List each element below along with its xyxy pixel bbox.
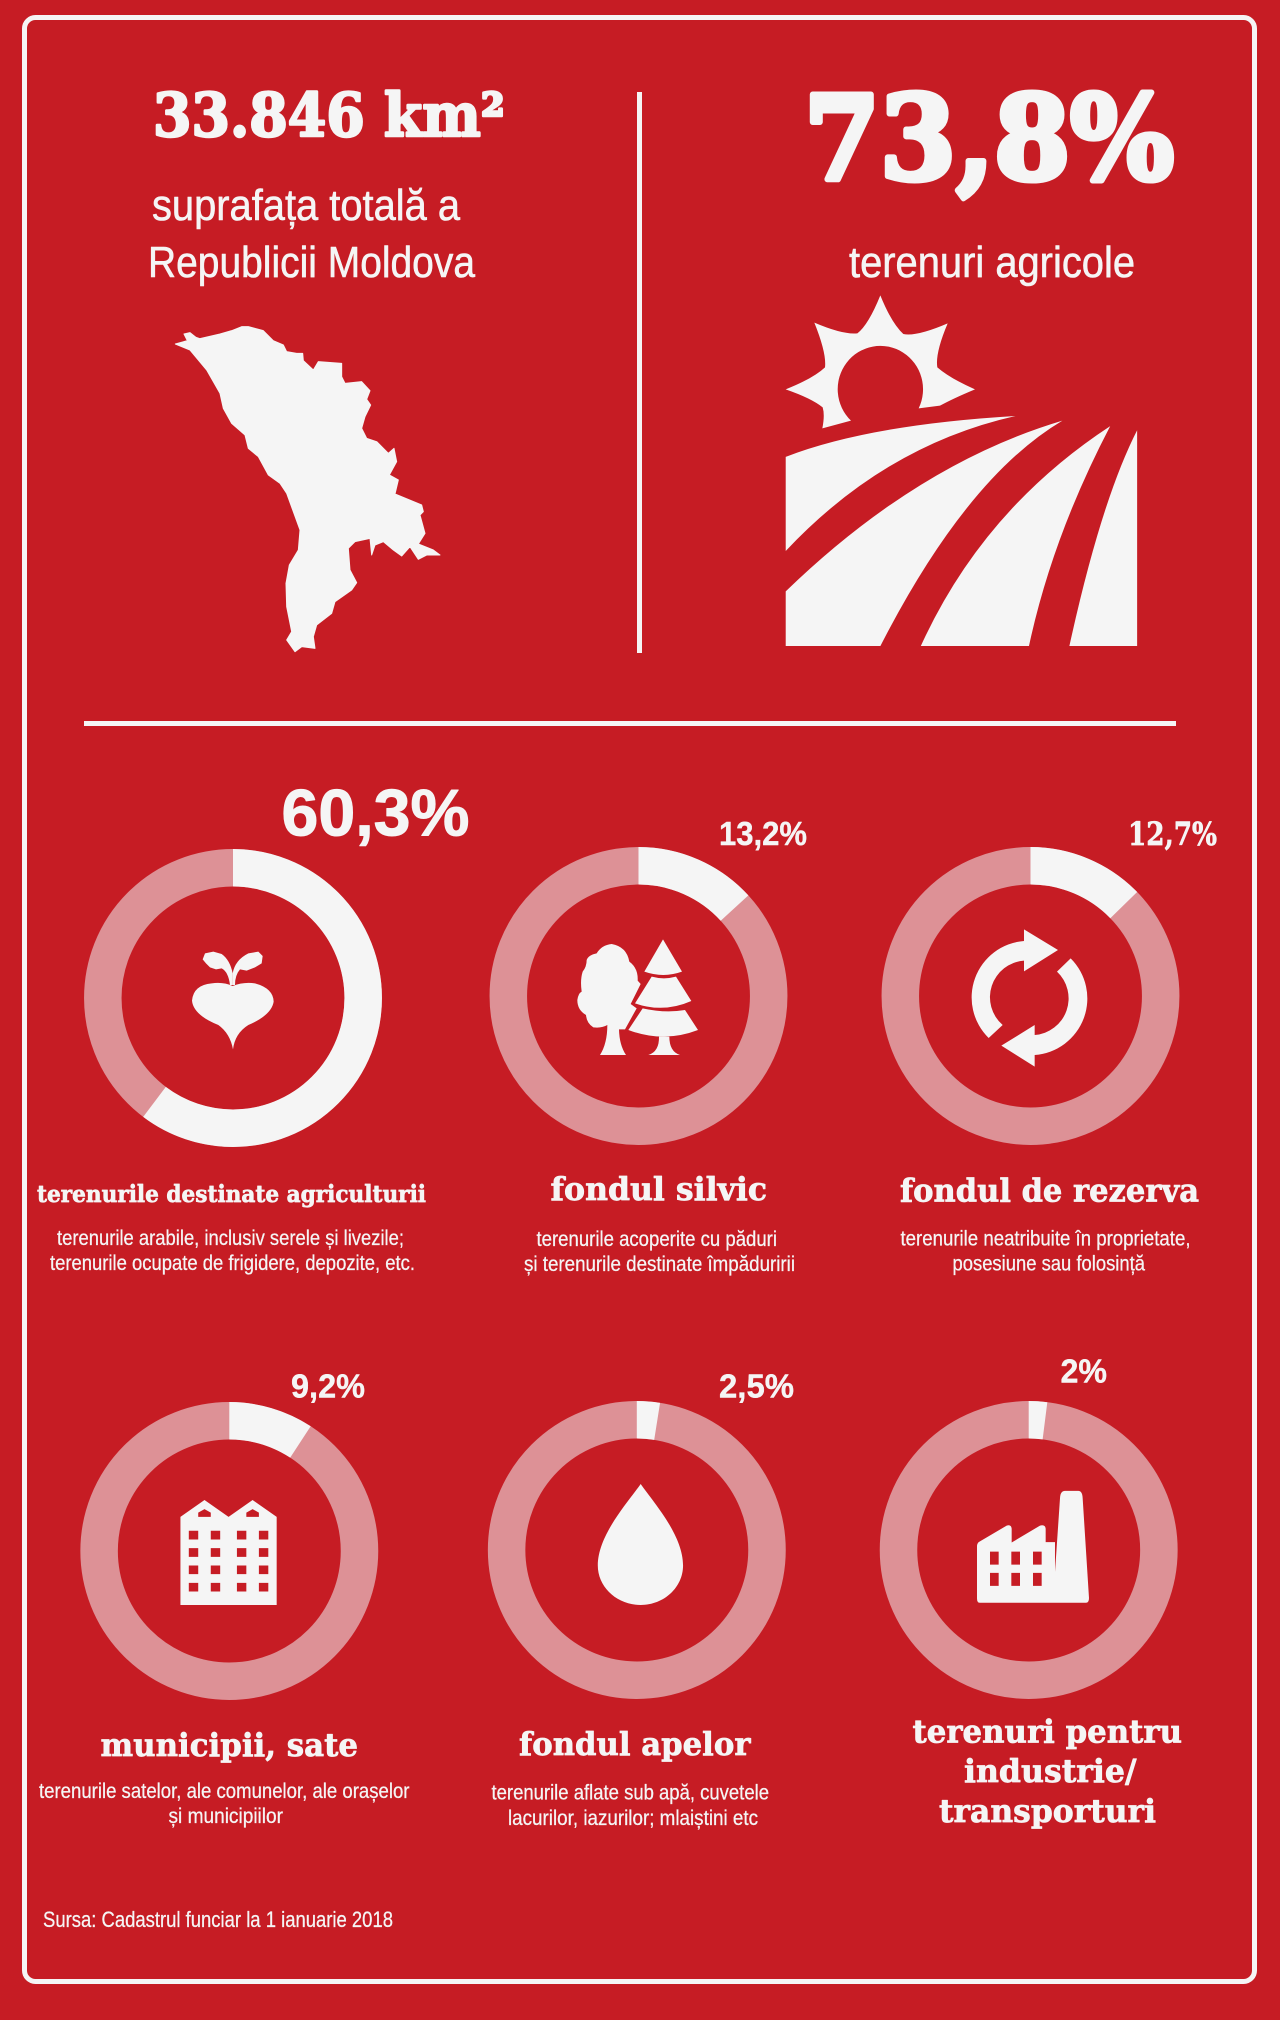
text: reserve fund description: posesiune sau folosință [952,1252,1145,1276]
heading: industry and transport: industrie/ [964,1752,1137,1790]
panel: industry and transport [898,1352,1182,1830]
icon: sun over field [786,295,1137,646]
heading: total area value: 33.846 km² [153,81,505,151]
panel: agriculture land [37,776,470,1275]
text: agriculture land description: terenurile ocupate de frigidere, depozite, etc. [50,1252,415,1275]
text: total area description: Republicii Moldova [148,238,475,287]
percentage: 12,7%: 12,7% [1128,815,1217,853]
donut chart: 2,5% [507,1420,767,1680]
icon: building [180,1500,277,1605]
icon: recycle arrows [972,929,1087,1067]
panel: total area [148,81,505,652]
text: total area description: suprafața totală a [152,181,460,230]
heading: municipalities: municipii, sate [100,1726,358,1764]
heading: industry and transport: transporturi [939,1792,1156,1830]
heading: agricultural land value: 73,8% [804,71,1174,207]
icon: beet [192,952,274,1049]
text: forest fund description: și terenurile destinate împăduririi [524,1253,795,1276]
percentage: 9,2%: 9,2% [291,1368,365,1404]
heading: agriculture land: terenurile destinate agriculturii [37,1181,426,1208]
donut chart: 13,2% [508,866,769,1126]
text: agriculture land description: terenurile arabile, inclusiv serele și livezile; [57,1227,404,1250]
text: water fund description: lacurilor, iazurilor; mlaiștini etc [508,1807,758,1830]
heading: reserve fund: fondul de rezerva [900,1172,1199,1210]
donut chart: 12,7% [900,866,1161,1126]
text: water fund description: terenurile aflate sub apă, cuvetele [492,1782,769,1804]
panel: municipalities [39,1368,410,1828]
donut chart: 60,3% [103,868,363,1128]
panel: water fund [492,1368,794,1830]
panel: agricultural land [786,71,1174,646]
percentage: 2,5%: 2,5% [719,1368,794,1404]
icon: map of Moldova [175,327,440,652]
text: agricultural land label: terenuri agricole [849,238,1135,287]
text: reserve fund description: terenurile neatribuite în proprietate, [900,1228,1190,1250]
text: agriculture land description [50,1227,415,1275]
icon: water drop [598,1484,683,1605]
text: reserve fund description [900,1228,1190,1276]
source note: Sursa: Cadastrul funciar la 1 ianuarie 2018 [43,1907,393,1932]
text: municipalities description [39,1780,410,1828]
heading: industry and transport: terenuri pentru [912,1712,1182,1750]
text: forest fund description [524,1228,795,1276]
heading: forest fund: fondul silvic [550,1170,767,1208]
heading: industry and transport [912,1712,1182,1830]
panel: reserve fund [900,815,1217,1276]
panel: forest fund [508,815,807,1276]
icon: factory [977,1491,1089,1603]
heading: water fund: fondul apelor [519,1725,752,1763]
icon: trees [577,939,698,1055]
percentage: 60,3%: 60,3% [282,776,470,850]
text: municipalities description: și municipiilor [168,1805,283,1828]
donut chart: 2% [898,1420,1159,1680]
text: total area description [148,181,475,287]
donut chart: 9,2% [99,1421,360,1681]
text: municipalities description: terenurile satelor, ale comunelor, ale orașelor [39,1780,410,1803]
percentage: 2%: 2% [1060,1352,1107,1390]
text: water fund description [492,1782,769,1830]
text: forest fund description: terenurile acoperite cu păduri [536,1228,777,1251]
percentage: 13,2%: 13,2% [719,815,807,852]
